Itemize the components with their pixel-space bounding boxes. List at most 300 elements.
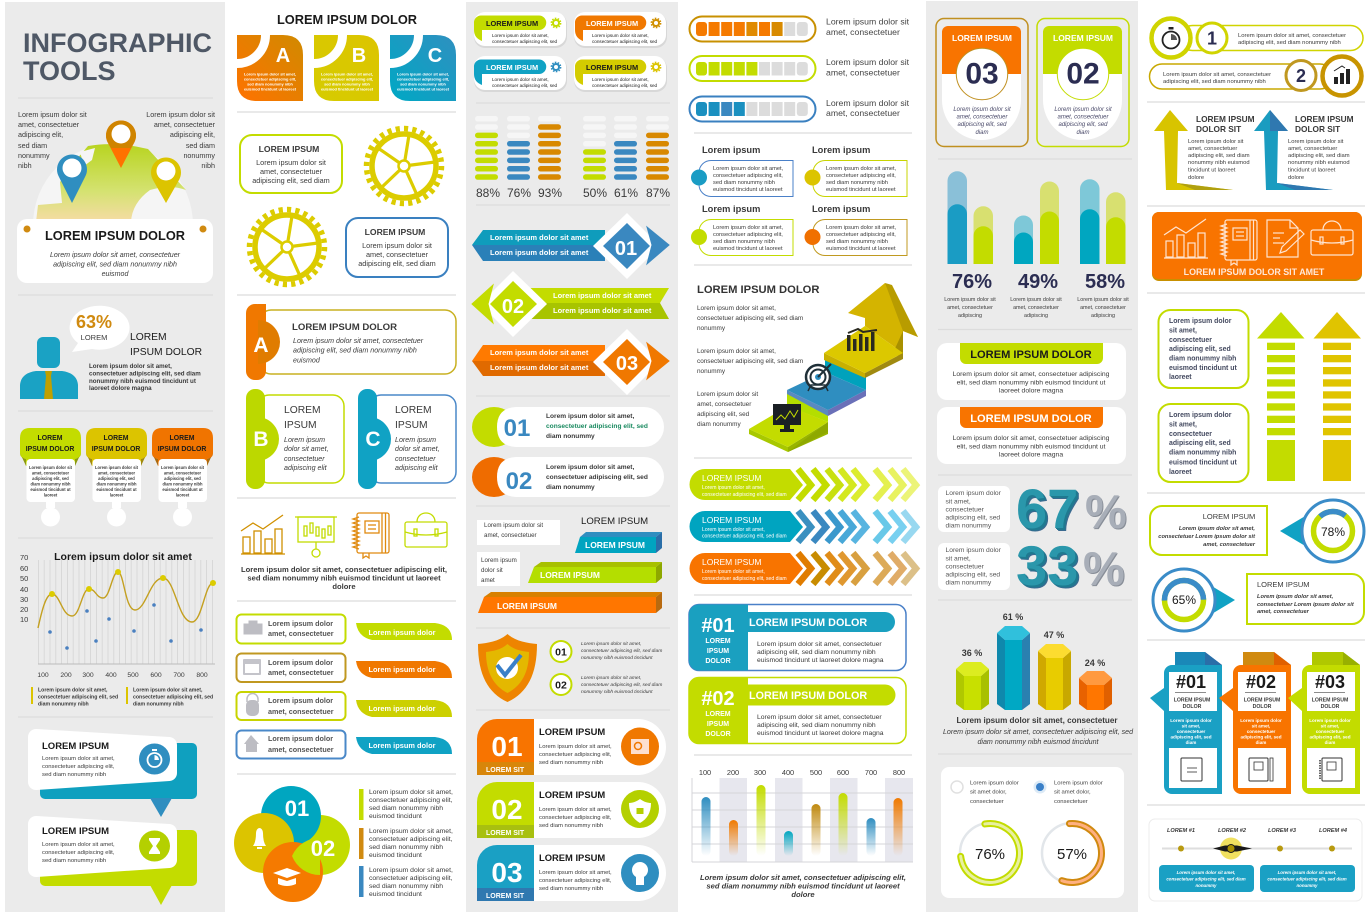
stat: 33%: % (1083, 542, 1125, 595)
icon: yellow map pin (151, 158, 181, 203)
text block: right of globe: amet, consectetuer (154, 120, 216, 129)
hexagonal 3d bar chart: 61 % (1003, 612, 1023, 622)
icon: briefcase outline (405, 513, 447, 547)
text block: icons caption: Lorem ipsum dolor sit amet, consectetuer adipiscing elit, (241, 565, 447, 574)
card: tag 1: Lorem ipsum dolor sit (29, 465, 73, 470)
chevron banner teal: LOREM IPSUM (702, 515, 762, 525)
text box: lower (1158, 404, 1248, 482)
text box: upper: sit amet, (1169, 328, 1197, 334)
flag card #01: adipiscing elit, sed (1170, 734, 1212, 740)
ribbon card #02: DOLOR (705, 731, 731, 738)
hexagonal 3d bar chart: 24 % (1085, 658, 1105, 668)
arrow banner 01 (472, 213, 669, 279)
label: lime (356, 623, 452, 640)
card: tag 1: diam nonummy nibh (30, 482, 71, 486)
text block: staircase 1: consectetuer adipiscing elit, sed diam (697, 315, 803, 322)
staircase arrow graphic (749, 283, 918, 452)
note card blue (691, 145, 793, 196)
callout: hourglass: sed diam nonummy nibh (42, 858, 106, 864)
text block: yellow arrow (1188, 114, 1255, 181)
card: tag 1 (20, 428, 81, 526)
number pill 02: Lorem ipsum dolor sit amet, (546, 464, 634, 471)
grouped capsule bars: 49% (1018, 271, 1058, 293)
3d ribbon: lime: LOREM IPSUM (540, 570, 600, 580)
note card blue: sed diam nonummy nibh (713, 180, 775, 186)
grouped capsule bars: 76% (952, 271, 992, 293)
number pill 01: 01 (504, 415, 530, 442)
line chart: 50 (20, 574, 28, 583)
grouped capsule bars (944, 171, 1129, 319)
row card 01 (477, 719, 666, 775)
callout: hourglass (36, 824, 197, 905)
stacked pill chart: 87% (646, 186, 670, 200)
flag card #01: consectetuer (1177, 729, 1206, 734)
note card orange: Lorem ipsum dolor sit amet, (826, 225, 897, 231)
badge 2: Lorem ipsum dolor sit amet, (592, 33, 649, 38)
panel: donut charts: 76% (975, 846, 1005, 863)
text: progress blue: amet, consectetuer (826, 108, 900, 118)
badge 3 (474, 56, 567, 92)
ribbon card #02: Lorem ipsum dolor sit amet, consectetuer (757, 714, 882, 721)
stat: 33%: adipiscing elit, sed (946, 572, 1000, 578)
arrow: blue (1254, 110, 1333, 190)
bar chart: 100 (699, 768, 711, 777)
number pill 02 (472, 457, 664, 497)
titled box: lime: laoreet dolore magna (999, 388, 1063, 394)
bar chart: 700 (865, 768, 877, 777)
icon: gear top (366, 128, 442, 204)
note card lime (691, 204, 793, 256)
card: C: Lorem ipsum dolor sit amet, (397, 72, 449, 76)
text block: venn item 1 (359, 789, 453, 820)
card: A: Lorem ipsum dolor sit amet, (244, 72, 296, 76)
row card 03: sed diam nonummy nibh (539, 886, 603, 892)
tabbed card: A: LOREM IPSUM DOLOR (292, 322, 397, 333)
stat: 67%: consectetuer (946, 506, 985, 514)
panel: donut charts: consectetuer (1054, 799, 1088, 805)
line chart: 200 (60, 672, 72, 679)
card: A: euismod tincidunt ut laoreet (244, 86, 297, 92)
card: C: euismod tincidunt ut laoreet (397, 86, 450, 92)
note card lime: consectetuer adipiscing elit, (713, 232, 783, 238)
row card 02: LOREM IPSUM (539, 789, 605, 800)
text block: staircase 3: Lorem ipsum dolor sit (697, 391, 758, 398)
arrow banner 01: Lorem ipsum dolor sit amet (490, 248, 589, 257)
ribbon card #02: LOREM IPSUM DOLOR (749, 690, 867, 702)
badge card 03 (936, 18, 1028, 146)
3d ribbon: lime (477, 552, 662, 586)
text block: venn item 2: Lorem ipsum dolor sit amet, (369, 828, 453, 835)
arrow: yellow (1154, 110, 1233, 190)
3d ribbon: lime: amet (481, 577, 495, 584)
timeline: nonummy (1196, 883, 1217, 888)
text block: venn item 1: sed diam nonummy nibh (369, 805, 443, 812)
card: B: sed diam nonummy nibh (324, 82, 371, 86)
flag card #02: DOLOR (1253, 704, 1272, 710)
card: tag 2: adipiscing elit, sed (98, 476, 135, 481)
list item 02: nonummy nibh euismod tincidunt (581, 689, 653, 695)
text block: hex chart caption: Lorem ipsum dolor sit amet, consectetuer adipiscing elit, sed (943, 728, 1134, 736)
legend: left: diam nonummy nibh (38, 702, 89, 708)
legend: left (31, 687, 118, 708)
card: tag 3: adipiscing elit, sed (164, 476, 201, 481)
text box: lower: euismod tincidunt ut (1169, 460, 1237, 466)
panel: column 4 (689, 16, 918, 899)
callout: stopwatch: LOREM IPSUM (42, 741, 109, 752)
badge 1: LOREM IPSUM (486, 19, 538, 28)
number pill 02: consectetuer adipiscing elit, sed (546, 474, 648, 481)
stat: 33%: sit amet, (946, 556, 971, 562)
badge 4: Lorem ipsum dolor sit amet, (592, 77, 649, 82)
line chart: 400 (105, 672, 117, 679)
text block: blue arrow: dolore (1288, 175, 1304, 181)
row card 03 (477, 845, 666, 901)
text block: venn item 1: euismod tincidunt (369, 813, 422, 820)
callout: hourglass: consectetuer adipiscing elit, (42, 850, 115, 856)
label: teal: Lorem ipsum dolor (369, 741, 436, 750)
bar chart: 200 (727, 768, 739, 777)
flag card #03: DOLOR (1321, 704, 1340, 710)
chevron banner lime (690, 469, 916, 500)
text block: staircase 3: adipiscing elit, sed (697, 411, 750, 418)
text block: hex chart caption: diam nonummy nibh euismod tincidunt (977, 738, 1100, 746)
card: C: consectetuer adipiscing elit, (397, 76, 449, 82)
heading: staircase: LOREM IPSUM DOLOR (697, 284, 819, 296)
arrow banner 03: Lorem ipsum dolor sit amet (490, 348, 589, 357)
line chart: 600 (150, 672, 162, 679)
list row: lock: amet, consectetuer (268, 707, 334, 716)
arrow: striped lime (1257, 312, 1304, 481)
badge card 03: LOREM IPSUM (952, 33, 1012, 43)
row card 01: Lorem ipsum dolor sit amet, (539, 744, 612, 750)
panel: donut charts: sit amet dolor, (970, 790, 1007, 796)
flag card #02: LOREM IPSUM (1244, 698, 1280, 704)
badge card 03: Lorem ipsum dolor sit (953, 107, 1011, 113)
badge 2: LOREM IPSUM (586, 19, 638, 28)
badge 3: Lorem ipsum dolor sit amet, (492, 77, 549, 82)
tabbed card: B: B (253, 428, 269, 451)
bar chart: 600 (837, 768, 849, 777)
callout: 65%: Lorem ipsum dolor sit amet, (1257, 594, 1334, 600)
flag card #01: #01 (1176, 672, 1206, 692)
panel: donut charts: Lorem ipsum dolor (1054, 780, 1103, 786)
ribbon card #01: #01 (701, 615, 735, 637)
card: A: sed diam nonummy nibh (247, 82, 294, 86)
card: B: B (352, 45, 366, 67)
row card 03: LOREM SIT (486, 893, 525, 900)
panel: orange icons (1152, 212, 1362, 281)
chevron banner orange (690, 553, 916, 584)
panel: donut charts (941, 767, 1124, 898)
stat: 33%: Lorem ipsum dolor (946, 547, 1002, 554)
badge card 02: adipiscing elit, sed (1058, 122, 1108, 128)
stat: 67%: diam nonummy (946, 522, 992, 530)
card: tag 3: laoreet (176, 492, 190, 498)
card: A (237, 35, 303, 101)
card: B: euismod tincidunt ut laoreet (321, 86, 374, 92)
label: lime: Lorem ipsum dolor (369, 628, 436, 637)
ribbon card #02: euismod tincidunt ut laoreet dolore magna (757, 730, 884, 737)
text box: blue outline (346, 218, 448, 277)
stat: 33%: consectetuer (946, 564, 985, 570)
tabbed card: C: consectetuer (395, 455, 436, 463)
text block: yellow arrow: Lorem ipsum dolor sit (1188, 139, 1244, 145)
tabbed card: C: dolor sit amet, (395, 445, 440, 453)
text block: bar chart caption: dolore (791, 890, 815, 899)
card: tag 3: amet, consectetuer (164, 470, 202, 476)
titled box: lime: Lorem ipsum dolor sit amet, consectetuer adipiscing (953, 371, 1110, 378)
badge card 02: diam (1076, 130, 1090, 136)
progress bar lime (690, 56, 816, 81)
stacked pill chart: 88% (476, 186, 500, 200)
donut: 78% (1280, 500, 1364, 562)
timeline: LOREM #4 (1319, 828, 1348, 834)
row card 01: LOREM IPSUM (539, 726, 605, 737)
text: progress lime: Lorem ipsum dolor sit (826, 57, 910, 67)
callout: stopwatch: sed diam nonummy nibh (42, 772, 106, 778)
venn diagram (234, 786, 350, 902)
ribbon card #01: IPSUM (707, 648, 729, 655)
panel: column 1 (5, 2, 225, 912)
list item 02: consectetuer adipiscing elit, sed diam (581, 682, 662, 688)
line chart: 30 (20, 595, 28, 604)
3d ribbon: orange (478, 592, 662, 613)
badge card 02: 02 (1066, 58, 1100, 90)
number pill 01 (472, 407, 664, 447)
timeline: nonummy (1297, 883, 1318, 888)
3d ribbon: blue: LOREM IPSUM (585, 540, 645, 550)
flag card #03: LOREM IPSUM (1312, 698, 1348, 704)
panel: orange icons: LOREM IPSUM DOLOR SIT AMET (1184, 267, 1325, 277)
note card yellow: sed diam nonummy nibh (826, 180, 888, 186)
flag card #03: sit amet, (1321, 724, 1339, 728)
line chart: Lorem ipsum dolor sit amet (54, 551, 192, 563)
tabbed card: B (246, 389, 344, 489)
line chart: 700 (173, 672, 185, 679)
panel: column 3 (466, 2, 678, 912)
text block: right of globe: sed diam (186, 141, 215, 150)
stat: 33%: diam nonummy (946, 580, 992, 586)
ribbon card #01: LOREM (705, 638, 731, 645)
chevron banner lime: LOREM IPSUM (702, 473, 762, 483)
text box: lower: adipiscing elit, sed (1169, 440, 1231, 447)
bar chart: 500 (810, 768, 822, 777)
tabbed card: B: Lorem ipsum (284, 436, 325, 444)
text: progress blue: Lorem ipsum dolor sit (826, 98, 910, 108)
icon: presentation board outline (295, 517, 337, 557)
timeline: Lorem ipsum dolor sit amet, (1278, 870, 1336, 875)
text box: lime outline: Lorem ipsum dolor sit (256, 158, 326, 167)
timeline: consectetuer adipiscing elit, sed diam (1166, 876, 1246, 882)
step row 2: Lorem ipsum dolor sit amet, consectetuer (1163, 72, 1271, 78)
line chart: 300 (82, 672, 94, 679)
text block: blue arrow: LOREM IPSUM (1295, 114, 1354, 124)
row card 03: Lorem ipsum dolor sit amet, (539, 870, 612, 876)
badge card 02 (1037, 18, 1129, 146)
list item 02: 02 (555, 680, 567, 692)
text block: left of globe: Lorem ipsum dolor sit (18, 110, 87, 119)
card: B (314, 35, 379, 101)
text block: left of globe: sed diam (18, 141, 47, 150)
flag card #01: DOLOR (1183, 704, 1202, 710)
note card orange (804, 204, 907, 256)
bar chart (692, 768, 913, 862)
text box: lime outline: LOREM IPSUM (259, 144, 319, 154)
text block: blue arrow: tincidunt ut laoreet (1288, 168, 1336, 174)
row card 03: 03 (491, 857, 523, 888)
note card orange: euismod tincidunt ut laoreet (826, 246, 896, 252)
text box: blue outline: Lorem ipsum dolor sit (362, 241, 432, 250)
badge 4: LOREM IPSUM (586, 63, 638, 72)
text block: yellow arrow: amet, consectetuer (1188, 146, 1237, 152)
chevron banner orange: consectetuer adipiscing elit, sed diam (702, 576, 787, 582)
icon: notebook outline (353, 513, 389, 558)
panel: donut charts: sit amet dolor, (1054, 790, 1091, 796)
step row 1 (1152, 18, 1363, 58)
text: progress orange: Lorem ipsum dolor sit (826, 16, 910, 26)
heading: LOREM IPSUM DOLOR (277, 12, 417, 27)
callout: 65%: LOREM IPSUM (1257, 580, 1310, 589)
callout: 78% (1150, 506, 1267, 555)
list row: calendar (236, 654, 346, 682)
legend: right: Lorem ipsum dolor sit amet, (133, 688, 203, 694)
text box: upper: Lorem ipsum dolor (1169, 318, 1232, 325)
heading: lorem ipsum dolor: IPSUM DOLOR (130, 347, 202, 358)
note card blue: consectetuer adipiscing elit, (713, 173, 783, 179)
text box: lower: consectetuer (1169, 431, 1212, 438)
chevron banner teal: Lorem ipsum dolor sit amet, (702, 527, 765, 533)
badge card 02: LOREM IPSUM (1053, 33, 1113, 43)
note card orange: consectetuer adipiscing elit, (826, 232, 896, 238)
note card lime: Lorem ipsum (702, 204, 760, 214)
flag card #01: Lorem ipsum dolor (1170, 718, 1212, 723)
stacked pill chart: 50% (583, 186, 607, 200)
tabbed card: C: IPSUM (395, 420, 428, 431)
list item 01: 01 (555, 646, 567, 658)
flag card #02 (1219, 652, 1291, 794)
ribbon card #01 (689, 604, 906, 670)
card: tag 1: adipiscing elit, sed (32, 476, 69, 481)
callout: stopwatch: Lorem ipsum dolor sit amet, (42, 756, 115, 762)
text block: icons caption: sed diam nonummy nibh euismod tincidunt ut laoreet (247, 574, 441, 582)
card: tag 3: diam nonummy nibh (162, 482, 203, 486)
text block: yellow arrow: tincidunt ut laoreet (1188, 168, 1236, 174)
text box: blue outline: adipiscing elit, sed diam (358, 259, 436, 268)
progress bar orange (690, 16, 816, 42)
grouped capsule bars: adipiscing (958, 313, 982, 319)
note card orange: sed diam nonummy nibh (826, 239, 888, 245)
text box: blue outline: amet, consectetuer (366, 250, 429, 259)
card: C (390, 35, 456, 101)
step row 1: Lorem ipsum dolor sit amet, consectetuer (1238, 33, 1346, 39)
speech bubble: 63%: 63% (76, 312, 112, 332)
list row: briefcase: Lorem ipsum dolor (268, 619, 333, 628)
row card 02: LOREM SIT (486, 830, 525, 837)
list row: calendar: amet, consectetuer (268, 668, 334, 677)
number pill 02: 02 (506, 468, 532, 495)
flag card #02: adipiscing elit, sed (1240, 734, 1282, 740)
panel: donut charts: 57% (1057, 846, 1087, 863)
note card yellow: consectetuer adipiscing elit, (826, 173, 896, 179)
icon: businessman (20, 337, 78, 399)
row card 03: consectetuer adipiscing elit, (539, 878, 612, 884)
line chart: 60 (20, 564, 28, 573)
text block: right of globe: Lorem ipsum dolor sit (146, 110, 215, 119)
row card 02: Lorem ipsum dolor sit amet, (539, 807, 612, 813)
3d ribbon: blue: Lorem ipsum dolor sit (484, 522, 543, 529)
text block: yellow arrow: adipiscing elit, sed diam (1188, 153, 1250, 159)
legend: left: Lorem ipsum dolor sit amet, (38, 688, 108, 694)
legend: right: consectetuer adipiscing elit, sed (133, 694, 213, 700)
flag card #02: sit amet, (1252, 724, 1270, 728)
card: tag 1: IPSUM DOLOR (26, 446, 74, 453)
text block: venn item 2: consectetuer adipiscing elit, (369, 836, 453, 843)
timeline: LOREM #2 (1218, 828, 1247, 834)
step row 2: adipiscing elit, sed diam nonummy nibh (1163, 79, 1266, 85)
text block: blue arrow: amet, consectetuer (1288, 146, 1337, 152)
note card yellow: Lorem ipsum dolor sit amet, (826, 166, 897, 172)
tabbed card: C: C (365, 428, 381, 451)
text block: blue arrow: DOLOR SIT (1295, 124, 1340, 134)
text block: yellow arrow: dolore (1188, 175, 1204, 181)
callout: 78%: consectetuer Lorem ipsum dolor sit (1158, 534, 1256, 540)
list row: lock: Lorem ipsum dolor (268, 696, 333, 705)
tabbed card: C: adipiscing elit (395, 464, 439, 472)
badge card 02: amet, consectetuer (1057, 114, 1110, 120)
grouped capsule bars: Lorem ipsum dolor sit (1010, 297, 1062, 303)
stat: 33%: 33 (1016, 534, 1078, 597)
list item 01: consectetuer adipiscing elit, sed diam (581, 648, 662, 654)
chevron banner teal: consectetuer adipiscing elit, sed diam (702, 534, 787, 540)
stat: 67%: Lorem ipsum dolor (946, 490, 1002, 497)
note card orange: Lorem ipsum (812, 204, 870, 214)
callout: hourglass: LOREM IPSUM (42, 826, 109, 837)
panel: donut charts: consectetuer (970, 799, 1004, 805)
step row 2 (1150, 56, 1362, 96)
card: tag 2: LOREM (104, 435, 129, 442)
text block: bar chart caption: sed diam nonummy nibh euismod tincidunt ut laoreet (706, 882, 900, 890)
card: tag 2: euismod tincidunt ut (96, 487, 137, 492)
text box: upper: consectetuer (1169, 337, 1212, 344)
arrow banner 03: Lorem ipsum dolor sit amet (490, 363, 589, 372)
card: tag 3: IPSUM DOLOR (158, 446, 206, 453)
timeline: consectetuer adipiscing elit, sed diam (1267, 876, 1347, 882)
text block: venn item 3: euismod tincidunt (369, 891, 422, 898)
label: orange (356, 661, 452, 678)
text block: blue arrow: Lorem ipsum dolor sit (1288, 139, 1344, 145)
text box: lime outline (240, 135, 342, 193)
text block: venn item 2: sed diam nonummy nibh (369, 844, 443, 851)
grouped capsule bars: amet, consectetuer (947, 305, 993, 311)
step row 2: 2 (1296, 66, 1306, 86)
timeline: LOREM #1 (1167, 828, 1195, 834)
number pill 01: diam nonummy (546, 433, 595, 440)
badge card 03: 03 (965, 58, 999, 90)
badge card 03: diam (975, 130, 989, 136)
titled box: orange: elit, sed diam nonummy nibh euismod tincidunt ut (957, 444, 1106, 450)
ribbon card #02 (689, 678, 906, 744)
grouped capsule bars: amet, consectetuer (1013, 305, 1059, 311)
step row 1: adipiscing elit, sed diam nonummy nibh (1238, 40, 1341, 46)
text block: person: Lorem ipsum dolor sit amet, (89, 363, 172, 370)
callout: 78%: amet, consectetuer (1203, 542, 1256, 548)
3d ribbon: blue (477, 516, 662, 553)
progress bar blue (690, 96, 816, 122)
text block: yellow arrow: LOREM IPSUM (1196, 114, 1255, 124)
callout: hourglass: Lorem ipsum dolor sit amet, (42, 842, 115, 848)
tabbed card: A: adipiscing elit, sed diam nonummy nibh (293, 346, 417, 354)
card: tag 1: laoreet (44, 492, 58, 498)
